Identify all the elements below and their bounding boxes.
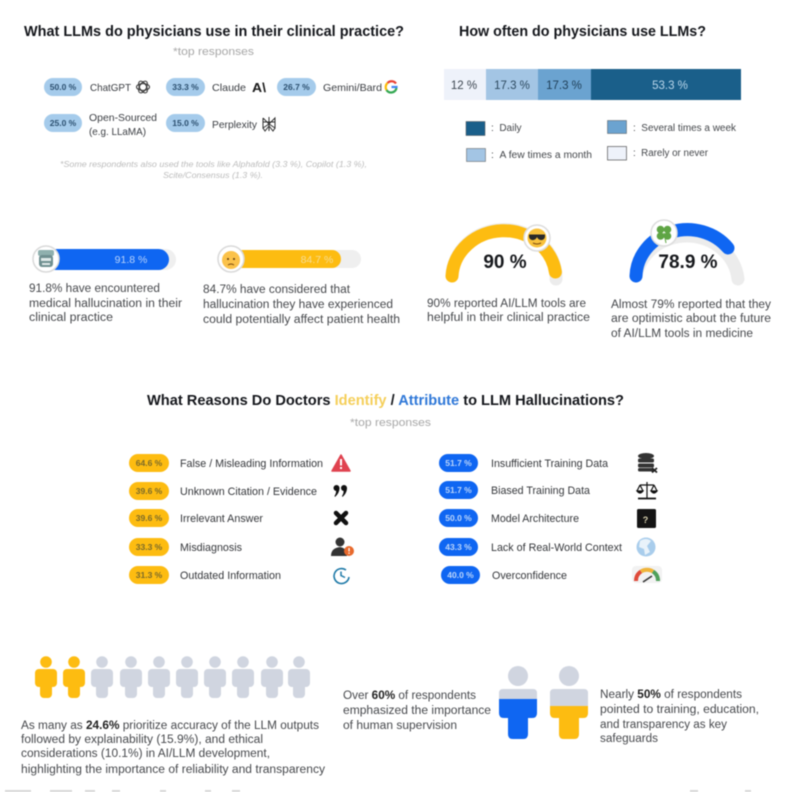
legend: [466, 120, 737, 162]
reason: Biased Training Data: 51.7 %: [445, 485, 472, 495]
stacked bar chart: 17.3 %: [546, 80, 582, 92]
reason: Model Architecture: 50.0 %: [445, 513, 472, 523]
pictogram: person 60 % blue: [499, 666, 537, 739]
item: Gemini/Bard: Gemini/Bard: [323, 82, 382, 94]
reason: Insufficient Training Data: [439, 453, 657, 472]
panel: priorities: [21, 656, 325, 776]
item: Claude: [166, 78, 266, 96]
description: priorities: followed by explainability (15.9%), and ethical: [21, 734, 263, 746]
item: ChatGPT: ChatGPT: [90, 82, 132, 94]
reason: Model Architecture: [439, 509, 656, 528]
item: Claude: Claude: [212, 82, 246, 94]
subtitle: top responses: *top responses: [350, 417, 432, 429]
stacked bar chart: [444, 69, 741, 100]
item: Open-Sourced: [44, 112, 157, 138]
description: supervision: of human supervision: [343, 720, 457, 732]
description: safeguards: pointed to training, education,: [600, 704, 759, 716]
reason: Unknown Citation / Evidence: Unknown Citation / Evidence: [180, 486, 317, 498]
legend: : Daily: [491, 123, 522, 134]
heading: LLMs used: What LLMs do physicians use in their clinical practice?: [24, 24, 404, 40]
reason: Outdated Information: Outdated Information: [180, 570, 281, 582]
icon: four-leaf clover: [651, 220, 677, 246]
reason: Overconfidence: [441, 566, 662, 584]
reason: Outdated Information: [129, 566, 349, 584]
description: patient health: could potentially affect patient health: [203, 314, 400, 326]
item: Gemini/Bard: [277, 78, 396, 96]
description: safeguards: [600, 689, 759, 745]
reason: Lack of Real-World Context: [439, 538, 656, 556]
footnote: other tools: [60, 159, 367, 180]
panel: LLMs used: [24, 24, 404, 180]
description: supervision: Over 60% of respondents: [343, 690, 476, 702]
reason: Model Architecture: Model Architecture: [491, 513, 579, 525]
stacked bar chart: 17.3 %: [494, 80, 530, 92]
gauge: 78.9 %: [636, 230, 738, 279]
reason: False / Misleading Information: [129, 454, 350, 472]
description: priorities: As many as 24.6% prioritize accuracy of the LLM outputs: [21, 720, 319, 732]
description: priorities: considerations (10.1%) in AI/LLM development,: [21, 748, 270, 760]
heading: frequency: How often do physicians use LLMs?: [459, 24, 706, 40]
panel: helpful gauge: [427, 225, 590, 324]
gauge: 90 %: [452, 229, 556, 279]
pictogram: ten people, two highlighted: [35, 656, 310, 698]
reason: Overconfidence: Overconfidence: [492, 570, 567, 582]
item: Claude: 33.3 %: [172, 82, 199, 92]
reason: Unknown Citation / Evidence: 39.6 %: [136, 486, 163, 496]
item: Perplexity: 15.0 %: [172, 118, 199, 128]
description: optimism: [611, 299, 771, 340]
legend: : A few times a month: [491, 150, 592, 161]
progress bar: 91.8 %: 91.8 %: [115, 254, 147, 266]
reason: Irrelevant Answer: Irrelevant Answer: [180, 513, 263, 525]
description: encountered: clinical practice: [29, 312, 113, 324]
description: safeguards: Nearly 50% of respondents: [600, 689, 742, 701]
stacked bar chart: 12 %: [451, 80, 477, 92]
description: safeguards: safeguards: [600, 733, 658, 745]
gauge value: 78.9 %: 78.9 %: [658, 252, 718, 273]
panel: frequency of use: [444, 24, 741, 162]
description: optimism: are optimistic about the future: [611, 313, 771, 325]
footnote: other tools: *Some respondents also used the tools like Alphafold (3.3 %), Copilot (1.3 %),: [60, 159, 367, 169]
reason: Overconfidence: 40.0 %: [447, 570, 474, 580]
description: encountered: [29, 283, 182, 324]
reason: Insufficient Training Data: 51.7 %: [445, 458, 472, 468]
legend: : Several times a week: [633, 123, 737, 134]
progress bar: 91.8 %: [33, 246, 176, 272]
description: patient health: hallucination they have experienced: [203, 299, 393, 311]
subtitle: top responses: *top responses: [173, 46, 255, 58]
panel: reasons for hallucinations: [129, 393, 662, 584]
description: safeguards: and transparency as key: [600, 719, 727, 731]
description: optimism: Almost 79% reported that they: [611, 299, 771, 311]
pictogram: person 50 % yellow: [550, 666, 588, 739]
reason: Misdiagnosis: Misdiagnosis: [180, 542, 242, 554]
reason: Biased Training Data: Biased Training Data: [491, 485, 591, 497]
icon: sunglasses emoji: [524, 225, 550, 251]
heading: reasons: What Reasons Do Doctors Identify / Attribute to LLM Hallucinations?: [147, 393, 624, 409]
description: priorities: highlighting the importance of reliability and transparency: [21, 764, 325, 776]
reason: False / Misleading Information: False / Misleading Information: [180, 458, 323, 470]
reason: False / Misleading Information: 64.6 %: [136, 458, 163, 468]
reason: Misdiagnosis: 33.3 %: [136, 542, 163, 552]
reason: Lack of Real-World Context: Lack of Real-World Context: [491, 542, 622, 554]
reason: Unknown Citation / Evidence: [129, 482, 347, 500]
progress bar: 84.7 %: [218, 246, 361, 272]
reason: Biased Training Data: [439, 481, 657, 499]
panel: human supervision: [343, 666, 537, 739]
description: patient health: 84.7% have considered that: [203, 284, 351, 296]
progress bar: 84.7 %: 84.7 %: [301, 254, 333, 266]
stacked bar chart: 53.3 %: [652, 80, 688, 92]
item: Open-Sourced: Open-Sourced: [89, 112, 157, 124]
item: Open-Sourced: 25.0 %: [50, 118, 77, 128]
footnote: other tools: Scite/Consensus (1.3 %).: [163, 170, 263, 180]
item: Claude: A\: [252, 80, 266, 95]
reason: Irrelevant Answer: [129, 509, 346, 527]
description: helpful: helpful in their clinical practice: [427, 312, 590, 324]
item: ChatGPT: [44, 78, 150, 96]
description: supervision: [343, 690, 491, 732]
description: patient health: [203, 284, 400, 326]
description: encountered: 91.8% have encountered: [29, 283, 160, 295]
reason: Irrelevant Answer: 39.6 %: [136, 513, 163, 523]
description: optimism: of AI/LLM tools in medicine: [611, 328, 753, 340]
reason: Misdiagnosis: [129, 538, 354, 556]
gauge value: 90 %: 90 %: [483, 252, 527, 273]
reason: Outdated Information: 31.3 %: [136, 570, 163, 580]
reason: Lack of Real-World Context: 43.3 %: [445, 542, 472, 552]
reason: Model Architecture: ?: [643, 515, 648, 525]
panel: safeguards: [550, 666, 759, 745]
description: priorities: [21, 720, 325, 776]
panel: encountered hallucination: [29, 246, 182, 324]
panel: patient health: [203, 246, 400, 326]
panel: optimism gauge: [611, 220, 771, 340]
item: Perplexity: Perplexity: [212, 119, 258, 131]
description: helpful: [427, 298, 590, 324]
item: Open-Sourced: (e.g. LLaMA): [89, 126, 146, 138]
legend: : Rarely or never: [633, 148, 709, 159]
reason: Insufficient Training Data: Insufficient Training Data: [491, 458, 609, 470]
description: supervision: emphasized the importance: [343, 705, 491, 717]
item: Gemini/Bard: 26.7 %: [283, 82, 310, 92]
item: ChatGPT: 50.0 %: [50, 82, 77, 92]
item: Perplexity: [166, 114, 275, 132]
description: helpful: 90% reported AI/LLM tools are: [427, 298, 586, 310]
description: encountered: medical hallucination in their: [29, 298, 182, 310]
